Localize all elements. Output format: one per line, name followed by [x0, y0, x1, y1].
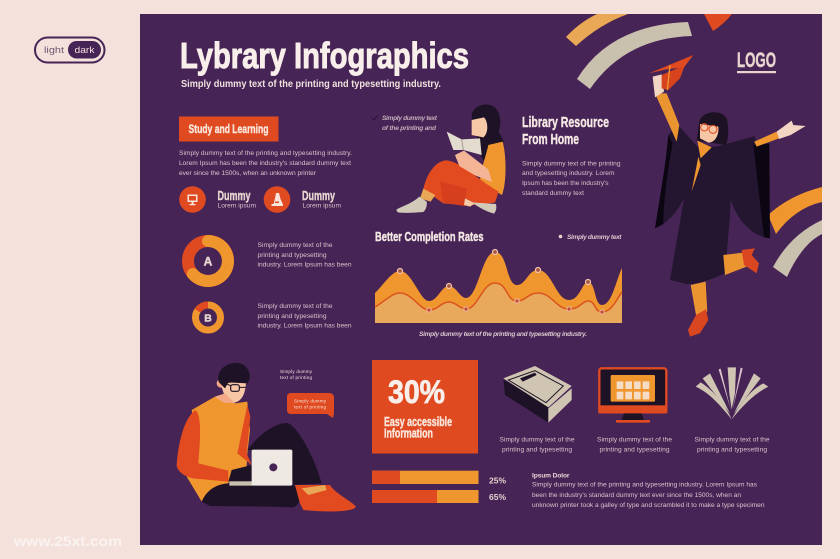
- icon captions: [500, 436, 770, 454]
- progress bar 65 percent: [372, 490, 506, 503]
- callout text: [280, 369, 313, 380]
- main panel: [140, 14, 822, 545]
- stat: monitor: [179, 186, 256, 213]
- paragraph: Lorem Ipsum has been the industry's standard dummy text: [179, 160, 351, 167]
- logo: [737, 49, 776, 73]
- heading label: [179, 116, 278, 142]
- paragraph: [179, 150, 352, 177]
- callout: 30 percent: [372, 360, 478, 454]
- light/dark toggle: light: [44, 45, 64, 56]
- callout text: Simply dummy: [280, 369, 313, 374]
- light/dark toggle: [35, 38, 104, 62]
- library resource text: Ipsum has been the industry's: [522, 180, 609, 187]
- donut A text: [258, 242, 352, 268]
- stat: microscope: [264, 186, 342, 213]
- donut chart A: A: [204, 254, 213, 268]
- subtitle: Simply dummy text of the printing and typesetting industry.: [181, 79, 441, 90]
- icon: open book fan: [696, 367, 768, 419]
- donut chart A: [188, 241, 228, 281]
- lower data points: [427, 299, 604, 314]
- icon captions: printing and typesetting: [600, 446, 670, 454]
- stat: monitor: Dummy: [218, 189, 251, 203]
- donut B text: printing and typesetting: [258, 313, 327, 320]
- logo: LOGO: [737, 49, 776, 72]
- decorative arcs right: [768, 187, 822, 277]
- callout: 30 percent: Easy accessible: [384, 415, 452, 429]
- icon captions: printing and typesetting: [502, 446, 572, 454]
- heading: better completion rates: Better Completion Rates: [375, 230, 484, 244]
- title: Lybrary Infographics: [180, 35, 469, 76]
- upper data points: [398, 250, 590, 288]
- heading: library resource: Library Resource: [522, 115, 609, 131]
- watermark: www.25xt.com: [13, 533, 122, 549]
- ipsum dolor text: Ipsum Dolor: [532, 472, 570, 480]
- stat: microscope: Dummy: [302, 189, 335, 203]
- progress bar 25 percent: 25%: [489, 476, 506, 486]
- area chart: [375, 250, 622, 323]
- library resource text: [522, 160, 621, 197]
- heading: library resource: From Home: [522, 132, 579, 148]
- library resource text: Simply dummy text of the printing: [522, 160, 621, 168]
- light/dark toggle: dark: [74, 45, 95, 56]
- illustration: reader with book: [397, 105, 506, 214]
- illustration: man with laptop: [177, 363, 356, 511]
- paragraph: ever since the 1500s, when an unknown printer: [179, 170, 317, 177]
- ipsum dolor text: been the industry's standard dummy text ever since the 1500s, when an: [532, 492, 741, 499]
- callout text: text of printing: [280, 375, 312, 380]
- speech bubble: Simply dummy: [294, 398, 327, 404]
- speech bubble: [287, 393, 334, 418]
- callout: 30 percent: 30%: [388, 374, 445, 410]
- icon captions: printing and typesetting: [697, 446, 767, 454]
- donut A text: industry. Lorem Ipsum has been: [258, 261, 352, 268]
- icon captions: Simply dummy text of the: [500, 436, 575, 444]
- donut B text: Simply dummy text of the: [258, 303, 333, 310]
- donut B text: [258, 303, 352, 329]
- chart caption: Simply dummy text of the printing and typesetting industry.: [419, 331, 587, 338]
- chart legend: Simply dummy text: [567, 234, 622, 241]
- callout above reader: Simply dummy text: [382, 115, 438, 122]
- illustration: graduate: [649, 55, 806, 337]
- stat: microscope: Lorem ipsum: [302, 202, 342, 210]
- donut chart B: B: [204, 312, 212, 324]
- study and learning section: [179, 116, 352, 213]
- callout above reader: of the printing and: [382, 125, 437, 132]
- library resource text: standard dummy text: [522, 190, 584, 197]
- callout above reader: [372, 115, 438, 132]
- decorative arcs top: [566, 14, 732, 89]
- icon captions: Simply dummy text of the: [597, 436, 672, 444]
- icon: monitor: [598, 368, 667, 423]
- donut chart B: [196, 305, 220, 330]
- ipsum dolor text: unknown printer took a galley of type and scrambled it to make a type specimen: [532, 502, 765, 509]
- donut A text: printing and typesetting: [258, 252, 327, 259]
- donut A text: Simply dummy text of the: [258, 242, 333, 249]
- speech bubble: text of printing: [294, 404, 326, 410]
- paragraph: Simply dummy text of the printing and typesetting industry.: [179, 150, 352, 157]
- icon captions: Simply dummy text of the: [694, 436, 770, 444]
- progress bar 65 percent: 65%: [489, 492, 506, 502]
- icon: closed book: [503, 366, 572, 423]
- library resource text: and typesetting industry. Lorem: [522, 170, 615, 177]
- stat: monitor: Lorem ipsum: [218, 202, 256, 210]
- ipsum dolor text: Simply dummy text of the printing and typesetting industry. Lorem Ipsum has: [532, 482, 758, 488]
- heading: library resource: [522, 115, 609, 148]
- heading label: Study and Learning: [188, 124, 268, 136]
- donut B text: industry. Lorem Ipsum has been: [258, 322, 352, 329]
- callout: 30 percent: Information: [384, 426, 433, 440]
- ipsum dolor text: [532, 472, 765, 509]
- progress bar 25 percent: [372, 471, 506, 486]
